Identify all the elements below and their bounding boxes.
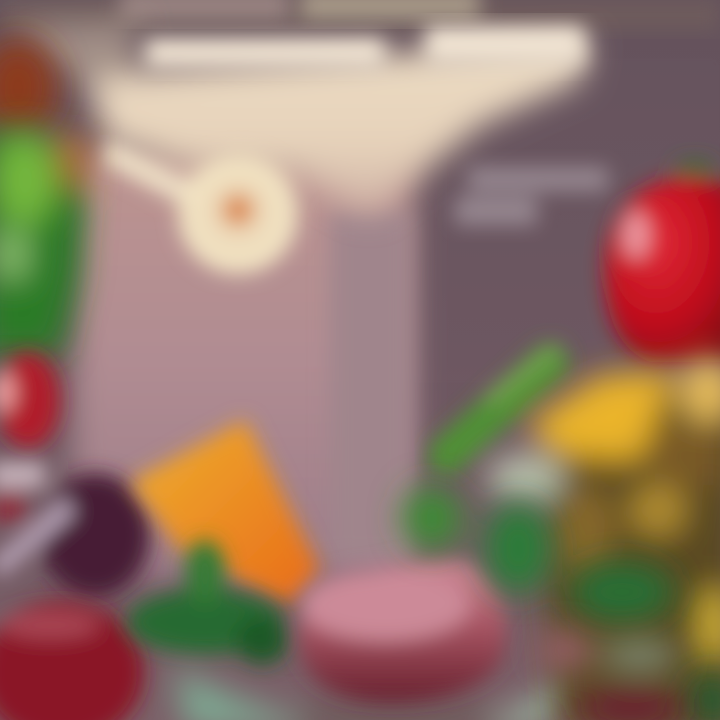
bottom right radish bbox=[537, 630, 685, 720]
right green leaves bbox=[402, 486, 720, 720]
ring icon bbox=[105, 150, 288, 264]
bottom bowl bbox=[175, 665, 600, 720]
funnel panel bbox=[10, 20, 590, 215]
green bean bbox=[447, 350, 555, 455]
bottom left apple bbox=[0, 600, 144, 720]
left onion and plum bbox=[0, 462, 150, 597]
left brown fruit bbox=[0, 38, 58, 138]
left red tomato bbox=[0, 352, 60, 448]
faint text block bbox=[455, 167, 608, 225]
central herb leaves bbox=[127, 540, 288, 664]
right apple bbox=[605, 161, 720, 362]
left lettuce bbox=[0, 125, 86, 355]
right vegetable pile bbox=[487, 358, 720, 720]
ham slice bbox=[298, 559, 507, 703]
grid column bbox=[330, 210, 412, 560]
orange wedge bbox=[130, 420, 320, 605]
heading bar bbox=[145, 26, 585, 68]
